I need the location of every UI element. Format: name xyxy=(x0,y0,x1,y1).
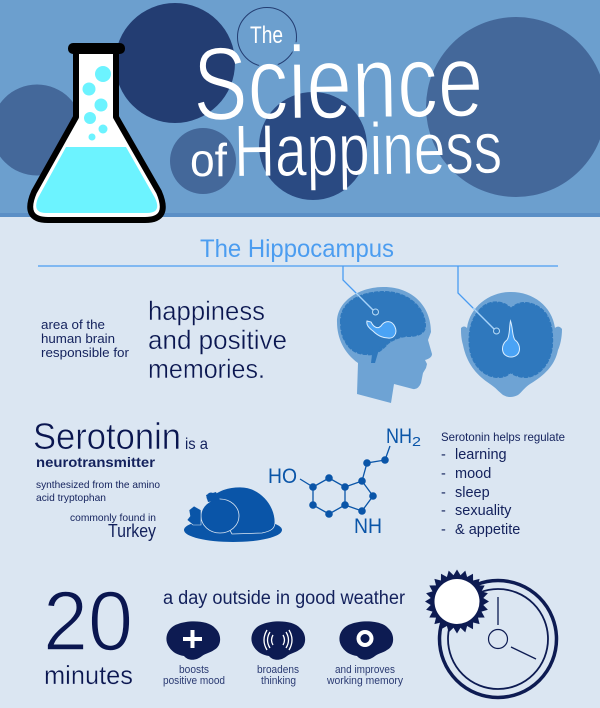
text: serotonin description xyxy=(33,416,208,541)
text: serotonin description: Serotonin xyxy=(33,416,181,457)
panel: header xyxy=(0,0,600,217)
text: serotonin helps regulate: learning xyxy=(455,447,507,463)
text: serotonin description: is a xyxy=(185,436,208,453)
text: serotonin description: neurotransmitter xyxy=(36,454,156,470)
text: area of the brain: human brain xyxy=(41,332,115,346)
icon: flask xyxy=(30,43,163,220)
text: boosts positive mood xyxy=(163,664,225,687)
text: happiness and positive memories xyxy=(148,296,287,384)
text: 20 minutes: 20 xyxy=(43,574,133,668)
text: happiness and positive memories: memories. xyxy=(148,354,265,384)
text: broadens thinking: broadens xyxy=(257,664,299,676)
text: a day outside: a day outside in good weather xyxy=(163,588,406,609)
icon: head side view xyxy=(337,287,432,403)
title: of xyxy=(190,134,227,186)
icon: brain with waves xyxy=(251,621,305,660)
title: Science xyxy=(192,23,484,143)
text: serotonin description: acid tryptophan xyxy=(36,492,106,504)
chart: molecule: NH xyxy=(386,425,412,448)
text: serotonin helps regulate: - xyxy=(441,447,446,463)
text: serotonin description: synthesized from the amino xyxy=(36,479,160,491)
text: happiness and positive memories: and positive xyxy=(148,325,287,355)
icon: clock with sun xyxy=(425,570,556,698)
text: area of the brain: area of the xyxy=(41,318,105,332)
text: serotonin helps regulate: - xyxy=(441,466,446,482)
text: and improves working memory: and improves xyxy=(335,664,395,676)
text: serotonin helps regulate xyxy=(441,430,565,538)
text: serotonin helps regulate: - xyxy=(441,503,446,519)
text: happiness and positive memories: happiness xyxy=(148,296,265,326)
text: serotonin description: Turkey xyxy=(108,521,156,541)
text: 20 minutes: minutes xyxy=(44,660,133,690)
text: serotonin helps regulate: & appetite xyxy=(455,522,520,538)
text: and improves working memory: working memory xyxy=(326,675,403,687)
text: broadens thinking: thinking xyxy=(261,675,296,687)
text: serotonin description: commonly found in xyxy=(70,512,156,524)
chart: molecule: NH xyxy=(354,515,382,538)
text: serotonin helps regulate: sleep xyxy=(455,485,490,501)
chart: molecule: HO xyxy=(268,465,297,488)
icon: turkey xyxy=(184,487,282,542)
icon: brain with gear xyxy=(339,621,393,660)
text: serotonin helps regulate: Serotonin helps regulate xyxy=(441,430,565,444)
chart: molecule: 2 xyxy=(412,434,421,449)
title: Happiness xyxy=(233,106,503,192)
text: serotonin helps regulate: mood xyxy=(455,466,491,482)
heading: the hippocampus: The Hippocampus xyxy=(200,235,394,263)
icon: head back view xyxy=(461,292,562,397)
text: serotonin helps regulate: sexuality xyxy=(455,503,512,519)
chart: molecule xyxy=(268,425,421,538)
text: area of the brain xyxy=(41,318,129,360)
text: boosts positive mood: boosts xyxy=(179,664,209,676)
text: area of the brain: responsible for xyxy=(41,346,129,360)
text: serotonin helps regulate: - xyxy=(441,522,446,538)
title xyxy=(190,22,503,193)
text: broadens thinking xyxy=(257,664,299,687)
title: The xyxy=(250,22,283,49)
text: serotonin helps regulate: - xyxy=(441,485,446,501)
icon: brain with plus xyxy=(166,621,220,660)
text: boosts positive mood: positive mood xyxy=(163,675,225,687)
text: and improves working memory xyxy=(326,664,403,687)
divider line with pointers xyxy=(38,266,558,334)
